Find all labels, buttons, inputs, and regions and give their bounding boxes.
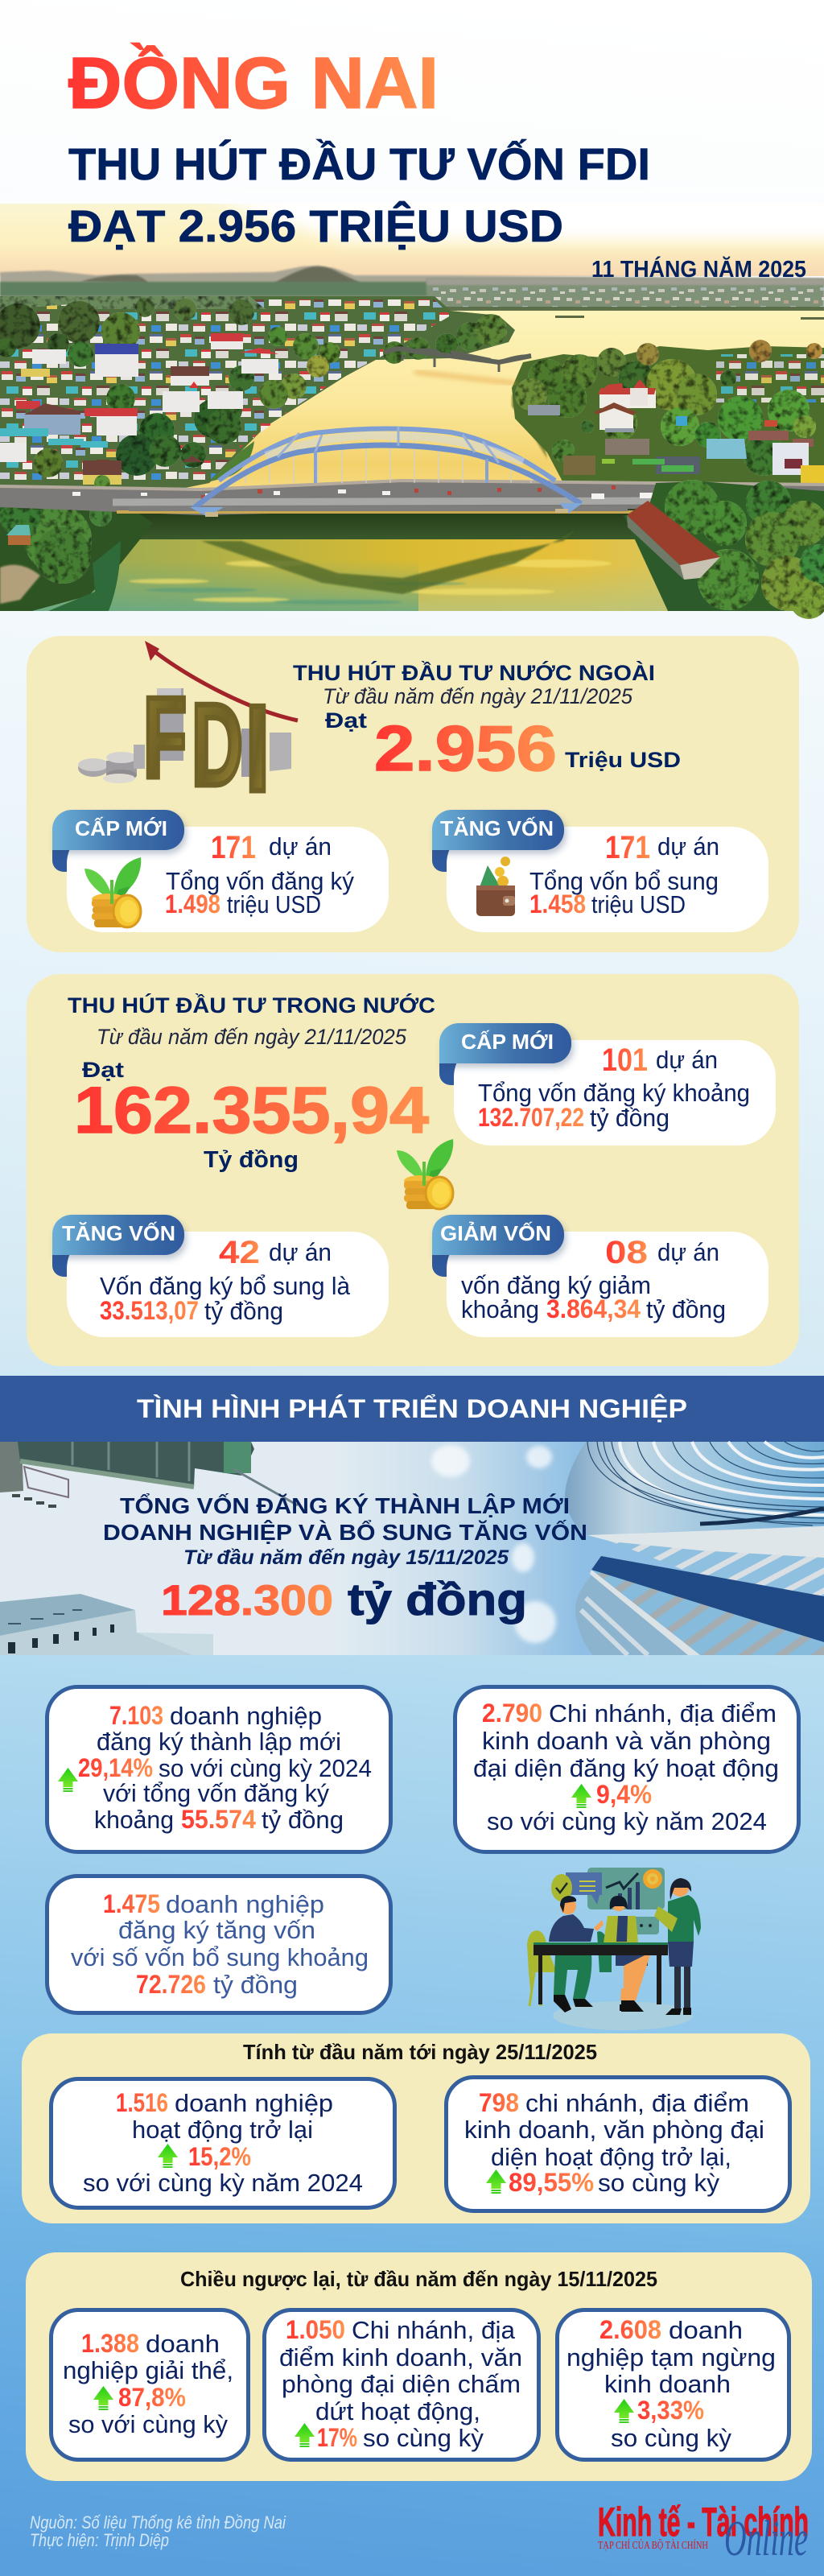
- box: branches closed: so cùng kỳ: [363, 2424, 484, 2452]
- card: new licences: triệu USD: [227, 890, 321, 919]
- box: dissolved enterprises: [52, 2310, 248, 2460]
- box: enterprises resumed: 15,2%: [188, 2142, 251, 2171]
- towers on the right: [565, 1442, 824, 1655]
- heading: [103, 1492, 587, 1545]
- box: new branches: 2.790: [482, 1699, 542, 1728]
- total value: Đạt: [325, 708, 367, 733]
- box: dissolved enterprises: so với cùng kỳ: [68, 2410, 228, 2438]
- box: new enterprises: tỷ đồng: [262, 1806, 344, 1834]
- card: new licences: CẤP MỚI: [75, 816, 167, 840]
- box: branches closed: 1.050: [286, 2315, 345, 2344]
- box: capital increases: 72.726: [136, 1970, 206, 1999]
- card: added capital: TĂNG VỐN: [62, 1221, 175, 1245]
- illustration: business team at a table: [527, 1868, 701, 2030]
- hero photo: bridge over the river at sunset: [0, 193, 824, 619]
- source credits: Thực hiện: Trịnh Diệp: [30, 2530, 169, 2550]
- heading: THU HÚT ĐẦU TƯ NƯỚC NGOÀI: [293, 660, 655, 685]
- logo: Kinh tế - Tài chính Online: [598, 2500, 809, 2566]
- total value: 128.300: [161, 1577, 333, 1624]
- card: new licences: [439, 1023, 776, 1146]
- panel: foreign investment: [27, 636, 799, 952]
- heading: Chiều ngược lại, từ đầu năm đến ngày 15/11/2025: [180, 2267, 657, 2291]
- heading: THU HÚT ĐẦU TƯ TRONG NƯỚC: [68, 993, 435, 1018]
- date range: Từ đầu năm đến ngày 21/11/2025: [323, 684, 633, 708]
- total value: Tỷ đồng: [204, 1147, 299, 1173]
- box: new enterprises: khoảng: [94, 1806, 174, 1834]
- box: suspended enterprises: [557, 2310, 789, 2460]
- card: new licences: [52, 810, 389, 932]
- box: branches resumed: diện hoạt động trở lại,: [491, 2143, 731, 2171]
- total value: Đạt: [82, 1058, 124, 1082]
- box: branches closed: 17%: [317, 2423, 357, 2452]
- building: low block bottom left: [0, 1594, 213, 1655]
- illustration: FDI letters with rising arrow: [78, 641, 298, 817]
- total value: Triệu USD: [565, 748, 681, 772]
- icon: wallet with coins: [476, 857, 515, 916]
- box: capital increases: tỷ đồng: [213, 1971, 298, 1999]
- box: enterprises resumed: hoạt động trở lại: [132, 2116, 313, 2144]
- card: new licences: 132.707,22: [478, 1103, 584, 1132]
- section banner: [0, 1376, 824, 1442]
- card: reduced capital: GIẢM VỐN: [440, 1221, 551, 1245]
- box: enterprises resumed: doanh nghiệp: [175, 2089, 333, 2117]
- box: suspended enterprises: so cùng kỳ: [611, 2424, 731, 2452]
- card: reduced capital: dự án: [657, 1238, 719, 1266]
- box: new enterprises: đăng ký thành lập mới: [97, 1728, 341, 1756]
- date range: Từ đầu năm đến ngày 15/11/2025: [183, 1546, 509, 1569]
- panel: resumed operations: [22, 2033, 810, 2223]
- section banner: TÌNH HÌNH PHÁT TRIỂN DOANH NGHIỆP: [137, 1394, 687, 1423]
- source credits: Nguồn: Số liệu Thống kê tỉnh Đồng Nai: [30, 2512, 286, 2533]
- card: new licences: Tổng vốn đăng ký khoảng: [478, 1079, 750, 1107]
- card: new licences: CẤP MỚI: [461, 1030, 554, 1054]
- box: branches closed: [264, 2310, 539, 2460]
- box: branches resumed: [446, 2077, 790, 2211]
- box: new branches: đại diện đăng ký hoạt động: [473, 1754, 779, 1782]
- card: new licences: Tổng vốn đăng ký: [166, 867, 354, 895]
- heading: Tính từ đầu năm tới ngày 25/11/2025: [243, 2040, 597, 2064]
- card: new licences: 1.498: [165, 890, 220, 919]
- heading: DOANH NGHIỆP VÀ BỔ SUNG TĂNG VỐN: [103, 1519, 587, 1545]
- card: new licences: 171: [211, 830, 256, 865]
- source credits: [30, 2512, 286, 2550]
- period label: 11 THÁNG NĂM 2025: [591, 255, 806, 283]
- building: construction site top left: [0, 1442, 298, 1508]
- box: new branches: so với cùng kỳ năm 2024: [487, 1807, 767, 1835]
- box: capital increases: với số vốn bổ sung khoảng: [71, 1943, 369, 1971]
- icon: plant on coins: [397, 1139, 453, 1209]
- box: new branches: Chi nhánh, địa điểm: [549, 1699, 777, 1728]
- card: reduced capital: vốn đăng ký giảm: [461, 1271, 651, 1299]
- card: added capital: 171: [605, 830, 650, 865]
- card: added capital: [432, 810, 768, 932]
- box: branches closed: dứt hoạt động,: [315, 2397, 480, 2425]
- box: new enterprises: 29,14%: [78, 1753, 153, 1782]
- box: capital increases: 1.475: [103, 1889, 160, 1918]
- box: new enterprises: doanh nghiệp: [170, 1702, 322, 1730]
- right lower trees and floating restaurant: [624, 480, 824, 619]
- card: added capital: Vốn đăng ký bổ sung là: [100, 1272, 351, 1300]
- total value: [161, 1574, 527, 1624]
- card: added capital: dự án: [657, 832, 719, 861]
- illustration: FDI letters with rising arrow: D: [192, 679, 243, 810]
- total value: tỷ đồng: [348, 1574, 527, 1624]
- card: added capital: [52, 1215, 389, 1337]
- card: reduced capital: [432, 1215, 768, 1337]
- icon: plant on coins: [84, 857, 141, 927]
- box: suspended enterprises: nghiệp tạm ngừng: [566, 2343, 776, 2372]
- total value: [74, 1058, 429, 1173]
- box: capital increases: [47, 1876, 391, 2013]
- card: added capital: triệu USD: [591, 890, 686, 919]
- card: added capital: Tổng vốn bổ sung: [529, 867, 719, 895]
- logo: Kinh tế - Tài chính Online: TẠP CHÍ CỦA BỘ TÀI CHÍNH: [598, 2538, 708, 2552]
- total value: 2.956: [374, 712, 557, 784]
- box: suspended enterprises: 2.608: [599, 2315, 661, 2344]
- box: new branches: kinh doanh và văn phòng: [482, 1727, 771, 1755]
- right bank with trees and houses: [512, 340, 824, 493]
- heading: TỔNG VỐN ĐĂNG KÝ THÀNH LẬP MỚI: [120, 1492, 570, 1518]
- date range: Từ đầu năm đến ngày 21/11/2025: [97, 1025, 407, 1049]
- card: new licences: 101: [602, 1042, 648, 1078]
- box: new enterprises: so với cùng kỳ 2024: [159, 1754, 372, 1782]
- road deck: [0, 481, 824, 515]
- panel: closures: [26, 2252, 812, 2481]
- box: new branches: [455, 1687, 798, 1852]
- box: enterprises resumed: 1.516: [116, 2088, 168, 2117]
- photo: skyscrapers seen from below: [0, 1442, 824, 1655]
- box: branches closed: phòng đại diện chấm: [282, 2370, 521, 2398]
- box: branches closed: điểm kinh doanh, văn: [279, 2343, 522, 2372]
- headline line 2: ĐẠT 2.956 TRIỆU USD: [68, 200, 563, 251]
- card: added capital: dự án: [269, 1238, 332, 1266]
- card: reduced capital: tỷ đồng: [646, 1295, 726, 1323]
- card: new licences: dự án: [656, 1046, 718, 1074]
- illustration: FDI letters with rising arrow: F: [143, 674, 187, 802]
- card: new licences: tỷ đồng: [590, 1104, 670, 1132]
- box: branches resumed: 89,55%: [509, 2168, 594, 2197]
- box: branches resumed: kinh doanh, văn phòng đại: [464, 2116, 764, 2144]
- total value: [325, 708, 681, 784]
- box: dissolved enterprises: nghiệp giải thể,: [63, 2356, 233, 2384]
- box: capital increases: doanh nghiệp: [166, 1890, 324, 1918]
- box: suspended enterprises: doanh: [669, 2316, 743, 2344]
- total value: 162.355,94: [74, 1074, 429, 1147]
- panel: domestic investment: [27, 974, 799, 1366]
- card: added capital: 1.458: [529, 890, 586, 919]
- illustration: FDI letters with rising arrow: I: [245, 680, 270, 817]
- box: dissolved enterprises: 87,8%: [118, 2383, 186, 2412]
- box: suspended enterprises: kinh doanh: [604, 2370, 731, 2398]
- card: reduced capital: 3.864,34: [546, 1294, 641, 1323]
- old truss bridge: [385, 349, 531, 383]
- card: reduced capital: khoảng: [461, 1295, 539, 1323]
- box: dissolved enterprises: 1.388: [81, 2329, 139, 2358]
- box: new enterprises: 55.574: [181, 1805, 256, 1834]
- headline line 1: THU HÚT ĐẦU TƯ VỐN FDI: [68, 138, 650, 189]
- box: capital increases: đăng ký tăng vốn: [118, 1916, 315, 1944]
- arch bridge: [190, 427, 583, 517]
- card: added capital: 42: [219, 1235, 260, 1270]
- box: suspended enterprises: 3,33%: [637, 2396, 704, 2425]
- card: new licences: dự án: [269, 832, 332, 861]
- box: new enterprises: với tổng vốn đăng ký: [103, 1779, 329, 1807]
- box: enterprises resumed: so với cùng kỳ năm 2024: [83, 2169, 363, 2197]
- left lower trees: [0, 475, 153, 611]
- card: reduced capital: 08: [605, 1235, 648, 1270]
- box: branches resumed: 798: [479, 2088, 519, 2117]
- box: branches closed: Chi nhánh, địa: [352, 2316, 516, 2344]
- box: new branches: 9,4%: [596, 1780, 652, 1809]
- title: Đồng Nai: ĐỒNG NAI: [68, 42, 439, 124]
- lower water: [0, 509, 824, 611]
- box: new enterprises: 7.103: [109, 1701, 163, 1730]
- box: enterprises resumed: [52, 2079, 394, 2207]
- water: river: [0, 311, 824, 516]
- box: new enterprises: [47, 1687, 391, 1852]
- left bank town: [0, 296, 515, 493]
- box: branches resumed: chi nhánh, địa điểm: [525, 2089, 749, 2117]
- card: added capital: tỷ đồng: [204, 1297, 283, 1325]
- card: added capital: TĂNG VỐN: [440, 816, 554, 840]
- box: branches resumed: so cùng kỳ: [598, 2169, 719, 2197]
- card: added capital: 33.513,07: [100, 1296, 199, 1325]
- box: dissolved enterprises: doanh: [146, 2330, 220, 2358]
